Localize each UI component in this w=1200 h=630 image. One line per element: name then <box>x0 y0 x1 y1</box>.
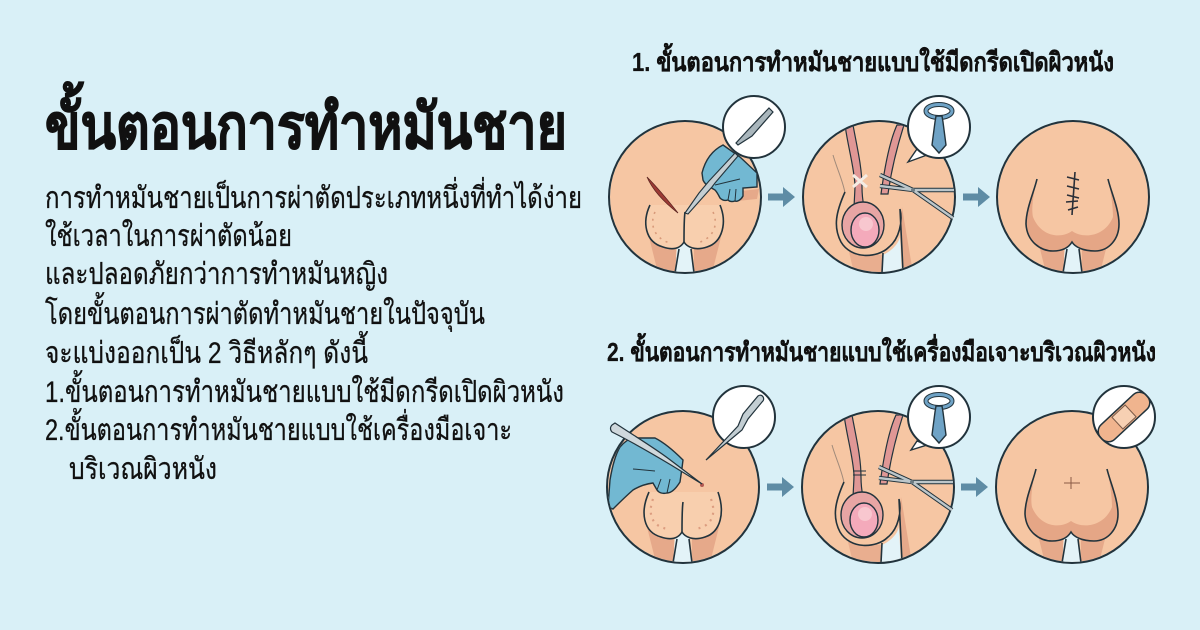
intro text block: การทำหมันชายเป็นการผ่าตัดประเภทหนึ่งที่ทำได้ง่าย <box>45 177 582 215</box>
arrow <box>768 187 795 207</box>
incision <box>647 177 678 213</box>
arrow <box>961 477 988 497</box>
intro text block: และปลอดภัยกว่าการทำหมันหญิง <box>45 258 388 291</box>
panel: method 1 step 3, stitched <box>997 121 1149 275</box>
panel: method 2 step 3, healed <box>996 411 1148 565</box>
healed puncture mark <box>1064 477 1080 489</box>
heading: method 1: 1. ขั้นตอนการทำหมันชายแบบใช้มีดกรีดเปิดผิวหนัง <box>632 42 1114 77</box>
panel: method 1 step 1, incision <box>609 121 761 275</box>
intro text block: 1.ขั้นตอนการทำหมันชายแบบใช้มีดกรีดเปิดผิวหนัง <box>45 370 564 409</box>
title: ขั้นตอนการทำหมันชาย <box>45 81 567 162</box>
scissors <box>880 175 954 218</box>
intro text block: บริเวณผิวหนัง <box>69 453 217 486</box>
tie on the cord <box>853 175 867 187</box>
puncture mark <box>700 483 704 487</box>
intro text block: 2.ขั้นตอนการทำหมันชายแบบใช้เครื่องมือเจาะ <box>45 408 512 447</box>
intro text block <box>45 177 582 486</box>
cut on the cord <box>853 471 866 475</box>
intro text block: โดยขั้นตอนการผ่าตัดทำหมันชายในปัจจุบัน <box>45 292 485 333</box>
intro text block: ใช้เวลาในการผ่าตัดน้อย <box>45 219 292 253</box>
panel: method 2 step 1, puncture <box>607 411 759 565</box>
inset: dissector <box>706 386 775 460</box>
icon: gloved hand with scalpel <box>685 145 757 214</box>
icon: gloved hand with dissector <box>608 423 702 509</box>
arrow <box>963 187 990 207</box>
intro text block: จะแบ่งออกเป็น 2 วิธีหลักๆ ดังนี้ <box>45 331 368 370</box>
inset: scalpel <box>723 96 785 158</box>
inset: bandage <box>1093 386 1155 448</box>
panel: method 1 step 2, ligation <box>803 121 955 275</box>
inset: ligature tie <box>908 96 970 162</box>
scissors <box>879 467 953 510</box>
stitches <box>1066 172 1079 215</box>
panel: method 2 step 2, ligation <box>802 411 954 565</box>
inset: ligature tie <box>908 386 970 450</box>
arrow <box>767 477 794 497</box>
forearm shadow <box>737 189 759 201</box>
